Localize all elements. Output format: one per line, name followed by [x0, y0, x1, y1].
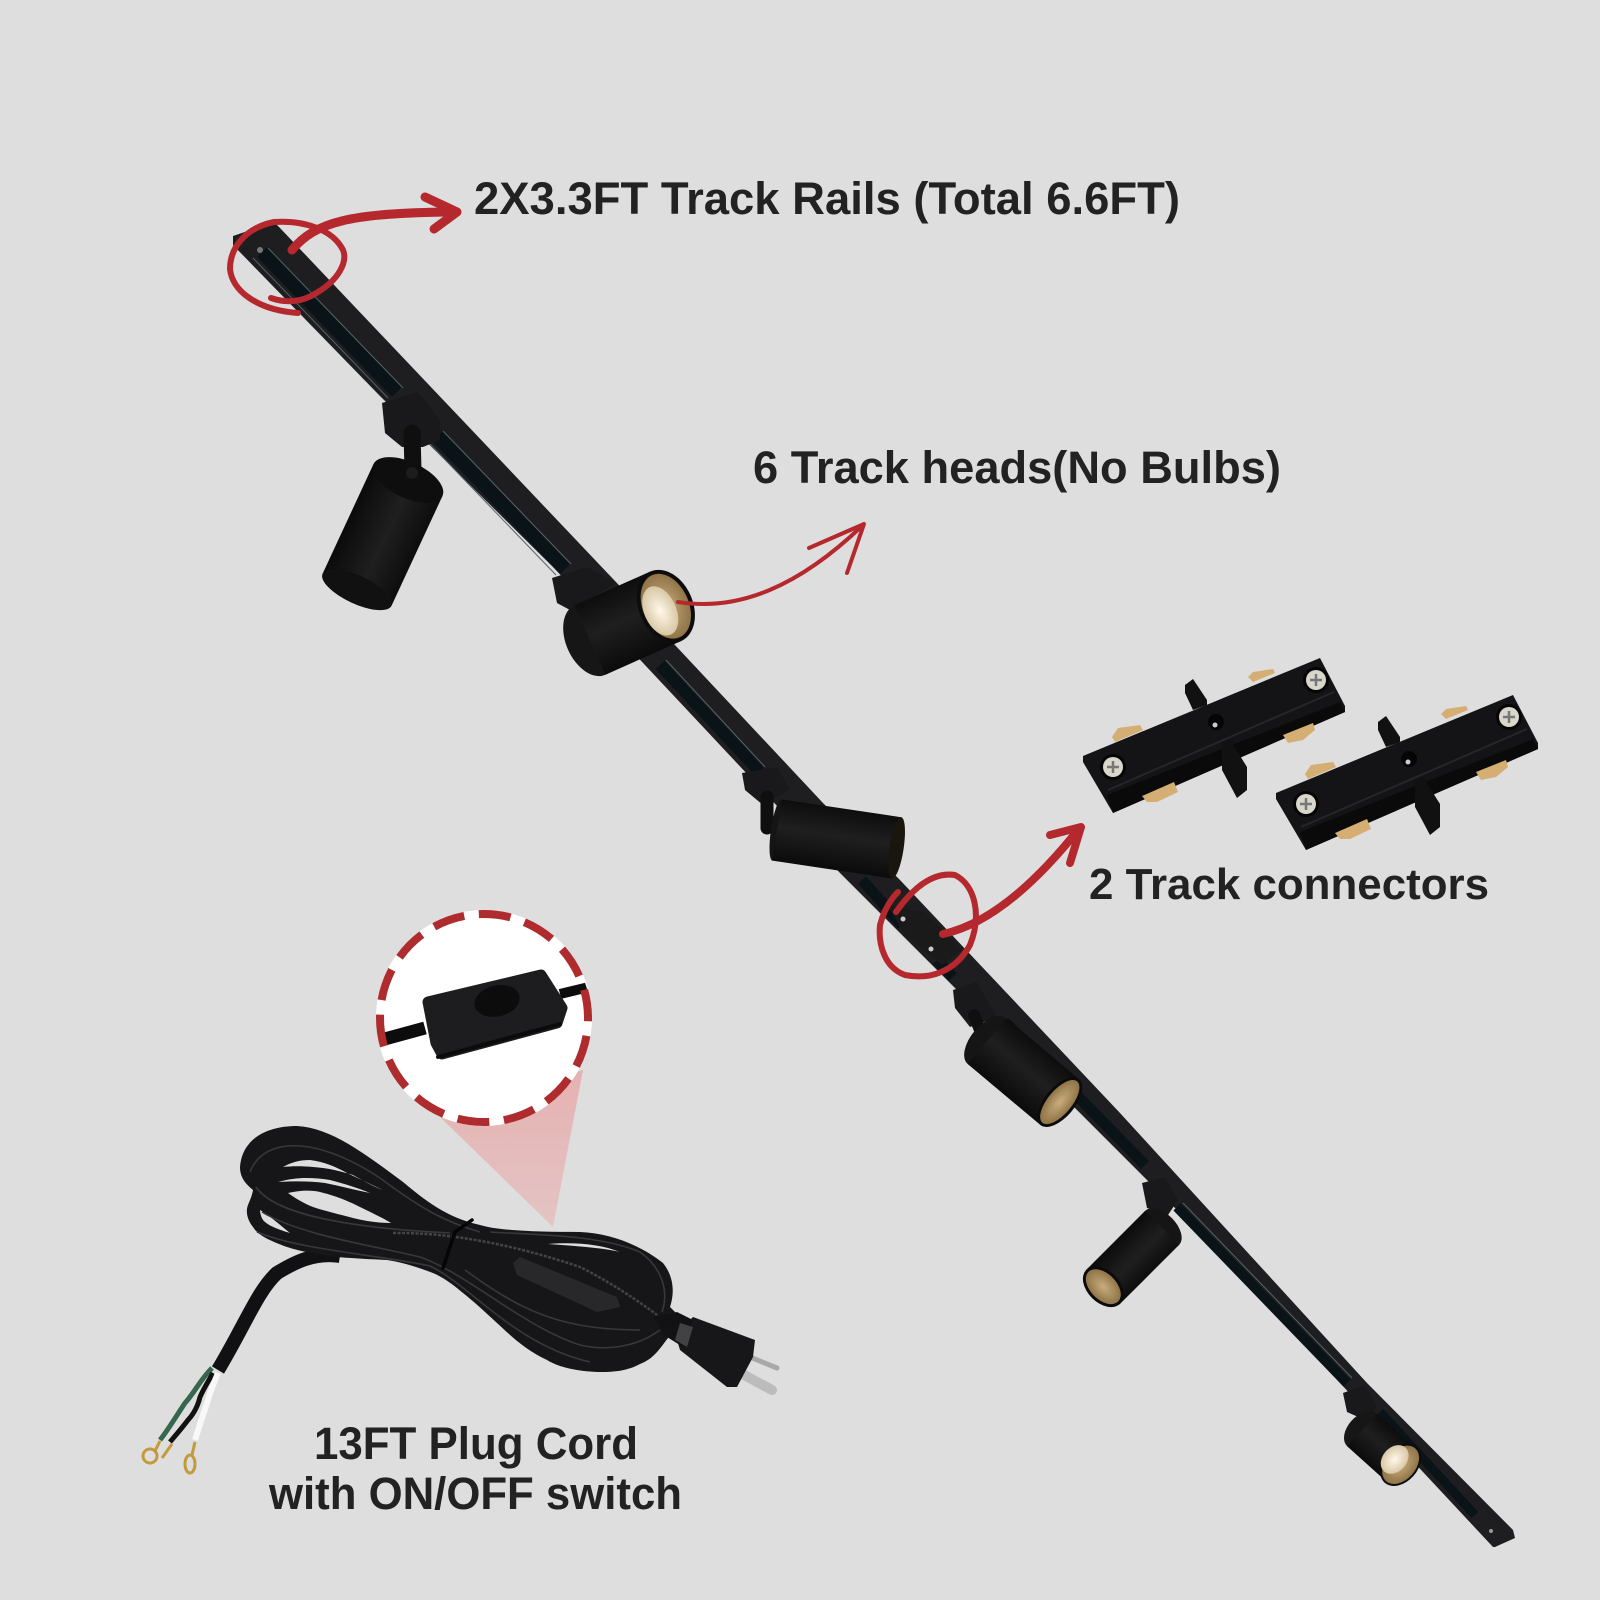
inline piece: [513, 1257, 620, 1312]
cord bundle: [240, 1126, 683, 1372]
track connector 2: [1276, 695, 1538, 850]
arrow: to track heads label: [678, 524, 864, 604]
arrow: to track rails label: [292, 197, 457, 250]
magnifier: switch close-up: [370, 910, 597, 1126]
label: plug cord: with ON/OFF switch: [268, 1468, 682, 1519]
cord tail: [218, 1255, 340, 1370]
track head 6: [1336, 1385, 1429, 1494]
plug: [653, 1312, 777, 1390]
track head 3: [742, 767, 908, 880]
track head 1: [317, 392, 450, 618]
track head 4: [953, 982, 1091, 1135]
wire terminals: [143, 1441, 195, 1473]
marked strand: [393, 1233, 657, 1315]
magnifier wedge: [440, 1070, 583, 1227]
track head 2: [552, 561, 706, 684]
track connector 1: [1083, 658, 1345, 813]
rail joint with connector: [888, 906, 962, 965]
label: plug cord: 13FT Plug Cord: [314, 1418, 638, 1469]
plug cord: [143, 1126, 777, 1473]
arrow: to connectors label: [943, 827, 1081, 934]
label: track rails: 2X3.3FT Track Rails (Total 6.6FT): [474, 173, 1180, 224]
label: track heads: 6 Track heads(No Bulbs): [753, 442, 1281, 493]
wires: [160, 1368, 218, 1442]
red circle: rail end: [230, 222, 344, 313]
red circle: rail joint: [880, 875, 976, 976]
strand highlights: [250, 1146, 665, 1362]
label: track connectors: 2 Track connectors: [1089, 860, 1489, 909]
cable tie: [443, 1220, 472, 1268]
track rail: [233, 222, 1515, 1547]
label: plug cord: [268, 1418, 682, 1519]
track head 5: [1075, 1177, 1189, 1315]
